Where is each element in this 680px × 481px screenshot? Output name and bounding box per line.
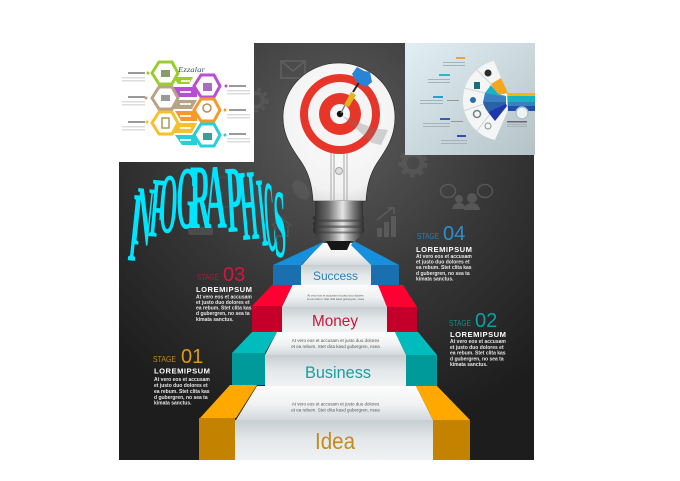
stage 01 block: ea rebum. Stet clita kas xyxy=(154,389,210,395)
step labels xyxy=(305,269,371,454)
stage 02 block: ea rebum. Stet clita kas xyxy=(450,351,506,357)
side captions xyxy=(122,72,250,142)
bulb glass xyxy=(283,63,395,201)
stage 04 block: LOREMIPSUM xyxy=(416,245,472,254)
label: Success: Success xyxy=(313,269,358,283)
label: Money: Money xyxy=(312,313,358,330)
stage 03 block: STAGE xyxy=(197,272,219,282)
hexagon ribbon banners xyxy=(173,77,197,145)
background icons xyxy=(188,61,492,237)
title: INFOGRAPHICS: A xyxy=(204,146,227,248)
title: INFOGRAPHICS: H xyxy=(235,148,262,262)
step body text xyxy=(291,294,380,412)
stage 03 block: d gubergren, no sea ta xyxy=(196,311,250,317)
title: INFOGRAPHICS: I xyxy=(253,157,271,268)
stage 04 block: kimata sanctus. xyxy=(416,276,454,282)
hexagon: teal xyxy=(194,124,220,146)
dart xyxy=(341,67,372,113)
bulb screw base xyxy=(313,201,364,250)
step body text: At vero eos et accusam et justo duo dolores xyxy=(292,338,380,343)
step body text: et ea rebum. Stet clita kasd gubergren, nsea xyxy=(307,297,364,301)
stage 02 block: At vero eos et accusam xyxy=(450,339,506,345)
stage 04 block: et justo duo dolores et xyxy=(416,260,470,266)
hexagon: tan xyxy=(152,87,178,109)
fan captions xyxy=(420,57,527,144)
inset: hexagon infographic xyxy=(119,43,254,162)
title: INFOGRAPHICS: O xyxy=(157,156,180,252)
staircase xyxy=(199,241,470,460)
stage 04 block xyxy=(416,223,472,282)
stage 04 block: At vero eos et accusam xyxy=(416,254,472,260)
title: INFOGRAPHICS: C xyxy=(261,159,279,273)
colour wedges xyxy=(483,78,508,121)
step body text: At vero eos et accusam et justo duo dolores xyxy=(307,294,364,298)
stage 03 block: et justo duo dolores et xyxy=(196,300,250,306)
title: INFOGRAPHICS: P xyxy=(224,147,245,254)
filament xyxy=(331,153,347,200)
stage 01 block: At vero eos et accusam xyxy=(154,377,210,383)
stage 01 block: kimata sanctus. xyxy=(154,400,192,406)
stage 01 block: 01 xyxy=(181,346,203,368)
stage 03 block xyxy=(196,264,252,323)
stage 02 block: LOREMIPSUM xyxy=(450,330,506,339)
stage 01 block: d gubergren, no sea ta xyxy=(154,395,208,401)
stage 01 block: et justo duo dolores et xyxy=(154,383,208,389)
stage 01 block: STAGE xyxy=(153,354,176,364)
light bulb with target xyxy=(283,63,395,250)
dart shadow xyxy=(342,116,388,145)
fan dividers xyxy=(463,68,491,132)
stage 03 block: LOREMIPSUM xyxy=(196,285,252,294)
dark background panel xyxy=(119,43,534,460)
colour stripes xyxy=(505,93,535,111)
step body text: et ea rebum. Stet clita kasd gubergren, nsea xyxy=(291,408,380,412)
title: INFOGRAPHICS xyxy=(125,146,288,283)
stage 02 block: et justo duo dolores et xyxy=(450,345,504,351)
step 1: Success xyxy=(273,241,399,285)
fan icons xyxy=(470,70,492,129)
inset heading: Ezzalar xyxy=(177,66,205,74)
stage 01 block xyxy=(153,346,210,406)
stage 04 block: STAGE xyxy=(417,231,439,241)
step 2: Money xyxy=(252,284,417,332)
stage 04 block: ea rebum. Stet clita kas xyxy=(416,265,472,271)
stage 04 block: d gubergren, no sea ta xyxy=(416,271,470,277)
title: INFOGRAPHICS: F xyxy=(146,160,169,256)
hexagon: yellow xyxy=(152,112,178,134)
title: INFOGRAPHICS: G xyxy=(176,149,197,249)
label: Idea: Idea xyxy=(315,428,355,454)
stage 03 block: At vero eos et accusam xyxy=(196,294,252,300)
stage 01 block: LOREMIPSUM xyxy=(154,366,210,376)
step 4: Idea xyxy=(199,385,470,460)
stage 02 block: kimata sanctus. xyxy=(450,362,488,368)
hexagon: green xyxy=(152,62,178,84)
hexagon: orange xyxy=(194,99,220,121)
stage 02 block: d gubergren, no sea ta xyxy=(450,356,504,362)
title: INFOGRAPHICS: S xyxy=(272,171,288,279)
stage 02 block: 02 xyxy=(475,310,497,332)
step 3: Business xyxy=(232,332,437,386)
target xyxy=(300,74,380,154)
stage 03 block: 03 xyxy=(223,264,245,286)
stage 03 block: kimata sanctus. xyxy=(196,317,234,323)
title: INFOGRAPHICS: I xyxy=(125,171,145,283)
hexagon icons xyxy=(161,70,212,140)
stage 02 block xyxy=(449,310,506,368)
hexagon: purple xyxy=(194,75,220,97)
stage 04 block: 04 xyxy=(443,223,465,245)
globe head icon xyxy=(516,107,528,119)
title: INFOGRAPHICS: R xyxy=(190,146,211,248)
stage 02 block: STAGE xyxy=(449,318,471,328)
label: Business: Business xyxy=(305,363,371,382)
step body text: et ea rebum. Stet clita kasd gubergren, nsea xyxy=(291,344,380,349)
stage 03 block: ea rebum. Stet clita kas xyxy=(196,306,252,312)
white fan segments xyxy=(463,61,508,140)
inset: semicircle fan infographic xyxy=(405,43,535,155)
title: INFOGRAPHICS: N xyxy=(130,168,158,265)
step body text: At vero eos et accusam et justo duo dolores xyxy=(292,402,380,406)
